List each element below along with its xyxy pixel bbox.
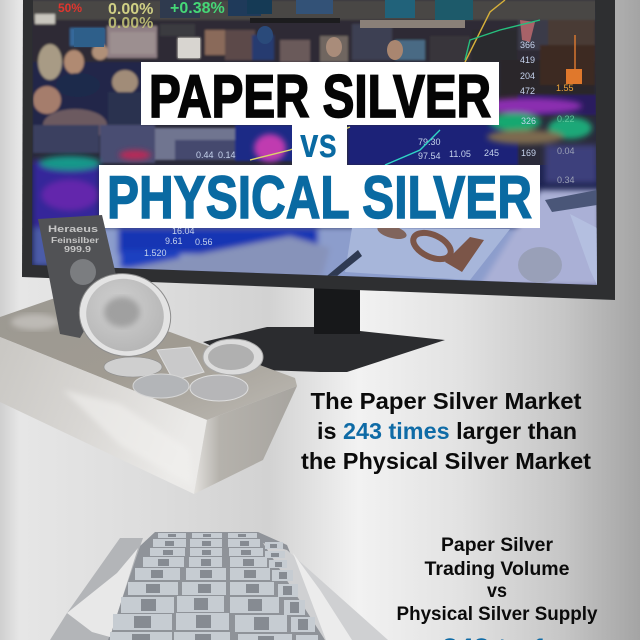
small heraeus ingot: Feinsilber [51,236,99,245]
ticker numbers: 0.44 [196,150,214,160]
small heraeus ingot [38,215,116,338]
statement line 3: the Physical Silver Market [301,448,591,474]
stack of dollar bills [50,532,388,640]
screen image [30,0,600,290]
comparison heading [396,534,598,625]
small heraeus ingot: 999.9 [64,245,92,254]
ticker numbers: 169 [521,148,536,158]
ticker numbers: 366 [520,40,535,50]
trading floor photo [30,0,600,165]
ticker numbers: 0.56 [195,237,213,247]
title banner [99,62,540,231]
ticker numbers: 472 [520,86,535,96]
ticker numbers: 0.22 [557,114,575,124]
screen percent figures: +0.38% [170,0,225,17]
ticker numbers: 79.30 [418,137,441,147]
statement line 2: is 243 times larger than [317,418,577,444]
large coin [70,263,180,367]
small heraeus ingot: Heraeus [48,224,98,234]
screen percent figures: 0.00% [108,1,153,18]
ticker numbers: 1.520 [144,248,167,258]
ticker numbers: 9.61 [165,236,183,246]
screen percent figures: 0.00% [108,15,153,32]
left curled white paper [67,548,138,637]
ticker numbers: 245 [484,148,499,158]
ticker numbers: 0.04 [557,146,575,156]
right curled white paper [293,553,352,640]
ticker numbers: 326 [521,116,536,126]
vs box [292,125,347,166]
small coins and bar [104,339,263,401]
comparison line 1: Paper Silver [441,534,553,556]
right paper wrap [263,543,388,640]
title: vs: vs [300,119,337,166]
bill portraits [132,534,308,640]
bill grid [110,533,318,640]
silver bullion pile [0,215,297,494]
ticker numbers: 419 [520,55,535,65]
ticker numbers: 16.04 [172,226,195,236]
title: physical silver: PHYSICAL SILVER [107,164,532,231]
comparison line 3: vs [487,580,507,602]
stack base [105,532,325,640]
large silver bar [0,298,297,494]
title line 2 box [99,165,540,228]
monitor stand [203,285,445,372]
ticker numbers: 97.54 [418,151,441,161]
colour market overlay [33,98,597,266]
ticker numbers: 0.14 [218,150,236,160]
ticker numbers: 1.55 [556,83,574,93]
title line 1 box [141,62,499,125]
ticker numbers: 0.34 [557,175,575,185]
statement: 243 times larger [301,388,591,474]
orange marker [566,69,582,84]
screen percent figures [58,2,224,28]
chart lines [250,0,575,165]
statement line 1: The Paper Silver Market [310,388,582,414]
monitor bezel [22,0,615,300]
title: paper silver: PAPER SILVER [149,63,491,130]
ticker numbers: 204 [520,71,535,81]
ticker numbers [144,40,575,258]
screen percent figures: 50% [58,1,82,15]
left paper wrap [50,538,143,640]
comparison line 4: Physical Silver Supply [396,603,598,625]
monitor [22,0,615,372]
banknotes [100,190,600,287]
comparison line 2: Trading Volume [424,558,570,580]
ticker numbers: 11.05 [449,149,471,159]
